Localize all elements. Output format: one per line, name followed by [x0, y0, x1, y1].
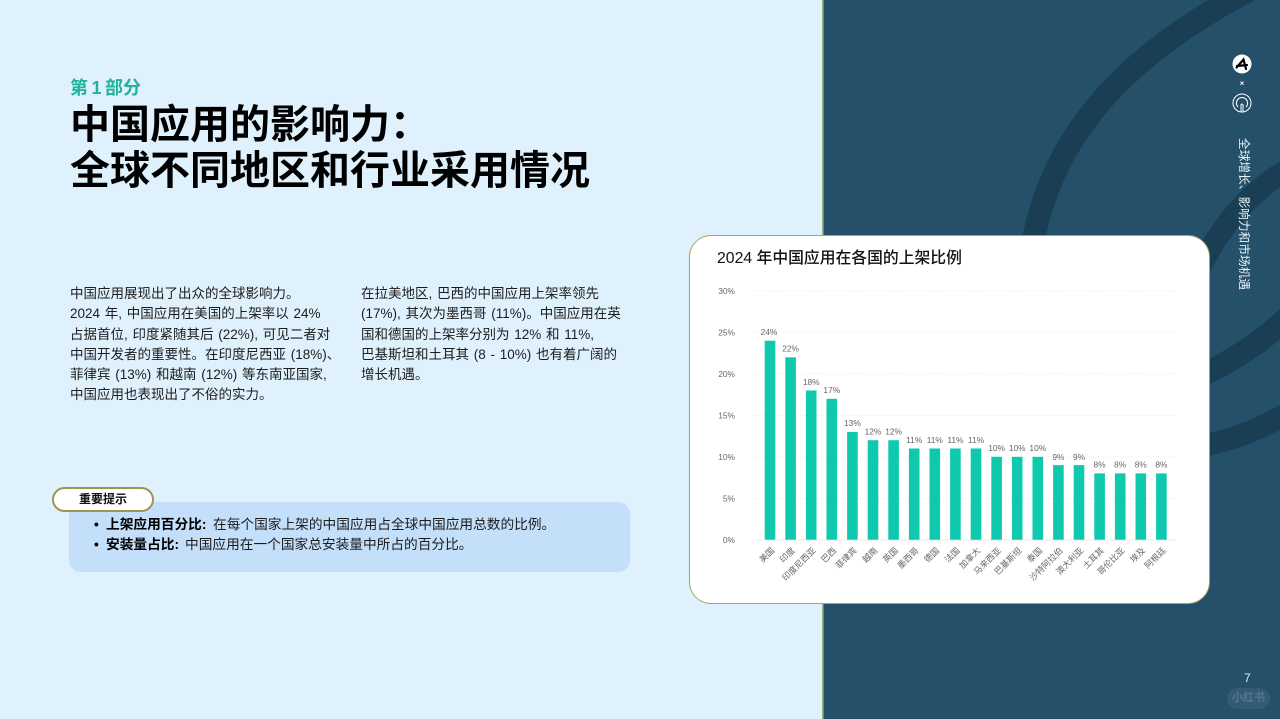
section label: 第 1 部分 — [70, 78, 141, 98]
country labels: 英国 — [880, 545, 900, 565]
text block: right column: (17%), 其次为墨西哥 (11%)。中国应用在英 — [361, 306, 621, 321]
text block: left column: 占据首位, 印度紧随其后 (22%), 可见二者对 — [70, 326, 330, 342]
panel: chart card — [689, 235, 1210, 604]
value labels: 9% — [1052, 452, 1065, 462]
text block: left column — [70, 286, 340, 402]
panel: dark right background with arcs — [822, 0, 1280, 719]
value labels: 11% — [906, 435, 923, 445]
value labels: 13% — [844, 418, 861, 428]
text block: right column: 巴基斯坦和土耳其 (8 - 10%) 也有着广阔的 — [361, 347, 617, 362]
value labels: 24% — [761, 327, 778, 337]
country labels: 哥伦比亚 — [1095, 544, 1127, 577]
country labels: 马来西亚 — [972, 545, 1003, 577]
value labels: 8% — [1114, 460, 1127, 470]
value labels: 10% — [1029, 443, 1047, 453]
country labels: 巴基斯坦 — [992, 544, 1024, 577]
text block: left column: 2024 年, 中国应用在美国的上架率以 24% — [70, 306, 321, 321]
text block: left column: 菲律宾 (13%) 和越南 (12%) 等东南亚国家, — [70, 367, 327, 382]
note: install share: 安装量占比: — [106, 537, 179, 552]
sidebar vertical title: 全球增长、影响力和市场机遇 — [1237, 138, 1250, 290]
key notes tag — [52, 487, 154, 512]
text block: right column: 国和德国的上架率分别为 12% 和 11%, — [361, 326, 594, 342]
value labels: 22% — [782, 344, 800, 354]
value labels: 8% — [1135, 460, 1147, 470]
country labels: 美国 — [756, 545, 776, 565]
y axis and grid: 10% — [718, 452, 736, 462]
note: listed apps percentage: 在每个国家上架的中国应用占全球中国应用总数的比例。 — [213, 517, 555, 532]
value labels: 12% — [885, 426, 903, 436]
y axis and grid — [718, 286, 1176, 545]
bar chart — [718, 286, 1176, 583]
text block: right column — [361, 286, 621, 382]
value labels — [761, 327, 1168, 470]
note: listed apps percentage: • — [94, 517, 99, 532]
country labels: 沙特阿拉伯 — [1027, 545, 1065, 583]
note: listed apps percentage: 上架应用百分比: — [106, 517, 206, 532]
watermark — [1227, 688, 1270, 709]
country labels: 菲律宾 — [833, 544, 859, 571]
icon: round outline logo — [1233, 94, 1251, 112]
note: install share: 中国应用在一个国家总安装量中所占的百分比。 — [185, 537, 472, 552]
icon: A logo — [1232, 54, 1252, 74]
country labels: 德国 — [921, 545, 941, 565]
country labels: 墨西哥 — [895, 545, 921, 571]
value labels: 8% — [1094, 460, 1106, 470]
y axis and grid: 0% — [723, 535, 736, 545]
value labels: 9% — [1073, 452, 1086, 462]
country labels: 巴西 — [819, 545, 838, 565]
y axis and grid: 20% — [718, 369, 736, 379]
page number: 7 — [1244, 671, 1251, 685]
country labels: 印度 — [777, 544, 797, 565]
chart title: 2024 年中国应用在各国的上架比例 — [717, 250, 962, 267]
text block: left column: 中国应用展现出了出众的全球影响力。 — [70, 286, 300, 301]
country labels: 阿根廷 — [1142, 544, 1168, 571]
y axis and grid: 15% — [718, 410, 736, 420]
title — [70, 103, 590, 193]
key notes tag: 重要提示 — [79, 492, 127, 506]
country labels: 法国 — [942, 545, 962, 565]
text block: right column: 在拉美地区, 巴西的中国应用上架率领先 — [361, 286, 599, 301]
title: 全球不同地区和行业采用情况 — [70, 149, 590, 193]
value labels: 17% — [823, 385, 841, 395]
country labels: 印度尼西亚 — [779, 544, 818, 583]
value labels: 11% — [947, 435, 964, 445]
value labels: 8% — [1155, 460, 1168, 470]
y axis and grid: 30% — [718, 286, 736, 296]
value labels: 12% — [865, 426, 882, 436]
value labels: 11% — [927, 435, 943, 445]
value labels: 18% — [803, 377, 820, 387]
country labels: 泰国 — [1024, 545, 1044, 565]
country labels: 越南 — [859, 544, 880, 565]
text block: left column: 中国应用也表现出了不俗的实力。 — [70, 387, 272, 402]
icon: brand logos — [1232, 54, 1252, 112]
text block: right column: 增长机遇。 — [361, 367, 428, 382]
country labels — [756, 544, 1168, 583]
country labels: 土耳其 — [1080, 544, 1106, 571]
title: 中国应用的影响力： — [70, 103, 430, 147]
value labels: 11% — [968, 435, 985, 445]
y axis and grid: 25% — [718, 328, 736, 338]
text block: left column: 中国开发者的重要性。在印度尼西亚 (18%)、 — [70, 347, 340, 362]
y axis and grid: 5% — [723, 494, 736, 504]
country labels: 加拿大 — [956, 544, 983, 571]
bars — [765, 341, 1167, 540]
icon: times sign — [1240, 82, 1244, 85]
note: install share: • — [94, 537, 99, 552]
value labels: 10% — [1009, 443, 1026, 453]
country labels: 澳大利亚 — [1053, 544, 1086, 577]
country labels: 埃及 — [1127, 544, 1147, 565]
value labels: 10% — [988, 443, 1006, 453]
watermark: 小红书 — [1232, 692, 1265, 704]
panel: key notes — [69, 502, 630, 572]
